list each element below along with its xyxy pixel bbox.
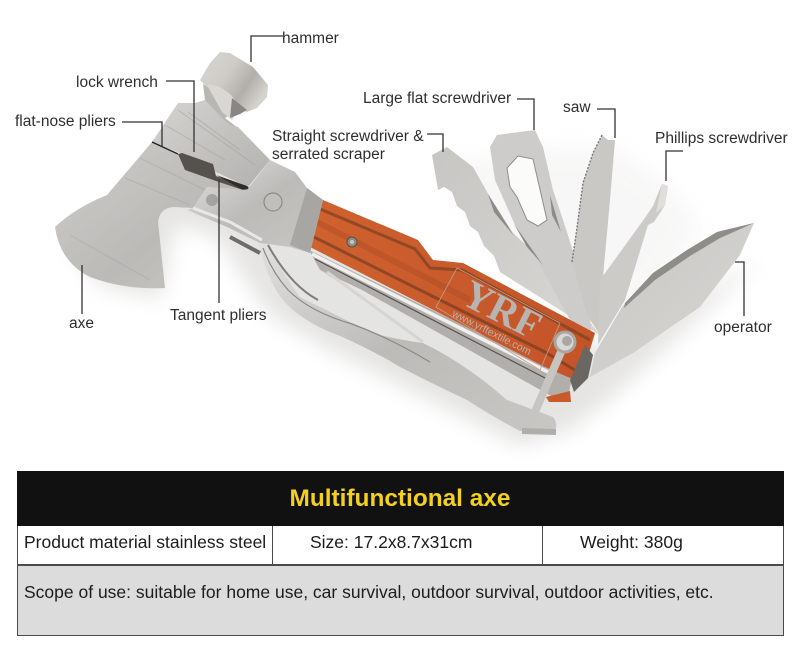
- pivot plate: [187, 160, 323, 253]
- cell: weight: Weight: 380g: [580, 532, 683, 552]
- tool: Phillips screwdriver: [598, 184, 668, 345]
- callout: straight screwdriver and serrated scraper: serrated scraper: [272, 146, 385, 163]
- cell: product material: [18, 526, 272, 564]
- lower jaw and axe blade: [55, 142, 243, 288]
- multitool photo illustration: [55, 52, 760, 445]
- brand watermark: YRF: YRF: [455, 271, 549, 348]
- brand watermark: YRF: [436, 268, 560, 370]
- callout: axe: axe: [69, 315, 94, 332]
- callout: saw: [563, 99, 615, 138]
- callout: straight screwdriver and serrated scraper: [272, 128, 443, 163]
- callout: axe: [69, 265, 94, 332]
- cell: scope of use: [18, 566, 783, 635]
- cell: weight: [543, 526, 783, 564]
- jaw teeth and gap: [152, 142, 250, 190]
- steel body rail: [309, 250, 572, 402]
- callout: Phillips screwdriver: Phillips screwdriver: [655, 130, 788, 147]
- callout: hammer: [251, 30, 339, 62]
- callout: Phillips screwdriver: [655, 130, 788, 181]
- cell: size: [273, 526, 542, 564]
- table heading: Multifunctional axe: Multifunctional axe: [290, 485, 510, 512]
- table heading: Multifunctional axe: [17, 471, 784, 526]
- callout: operator: operator: [714, 319, 772, 336]
- hammer head: [195, 52, 268, 135]
- cell: size: Size: 17.2x8.7x31cm: [310, 532, 472, 552]
- tool: saw: [572, 135, 615, 335]
- callout: flat-nose pliers: [15, 113, 162, 147]
- wooden handle: [310, 200, 595, 378]
- callout: hammer: hammer: [282, 30, 339, 47]
- lanyard ring: [522, 332, 575, 432]
- callout: flat-nose pliers: flat-nose pliers: [15, 113, 116, 130]
- callout: large flat screwdriver: Large flat screwdriver: [363, 90, 511, 107]
- tool: operator knife blade: [590, 223, 754, 377]
- callout: large flat screwdriver: [363, 90, 534, 130]
- tool: straight screwdriver and serrated scraper: [432, 147, 600, 335]
- brand watermark: YRF: www.yrftextile.com: [449, 307, 533, 358]
- callout: operator: [714, 262, 772, 336]
- folding pliers handle: [258, 240, 556, 434]
- callout: saw: saw: [563, 99, 591, 116]
- callout: lock wrench: [76, 74, 194, 152]
- specification table: [17, 471, 784, 636]
- callout: straight screwdriver and serrated scraper: Straight screwdriver &: [272, 128, 424, 145]
- cell: scope of use: Scope of use: suitable for home use, car survival, outdoor survival, outdoor activities, etc.: [24, 582, 714, 602]
- screw: [347, 237, 357, 247]
- upper jaw: [152, 100, 270, 187]
- tool: large flat screwdriver: [490, 130, 592, 340]
- callout: tangent pliers: Tangent pliers: [170, 307, 267, 324]
- callout: lock wrench: lock wrench: [76, 74, 158, 91]
- end pattern: [570, 345, 593, 392]
- cell: product material: Product material stainless steel: [24, 532, 266, 552]
